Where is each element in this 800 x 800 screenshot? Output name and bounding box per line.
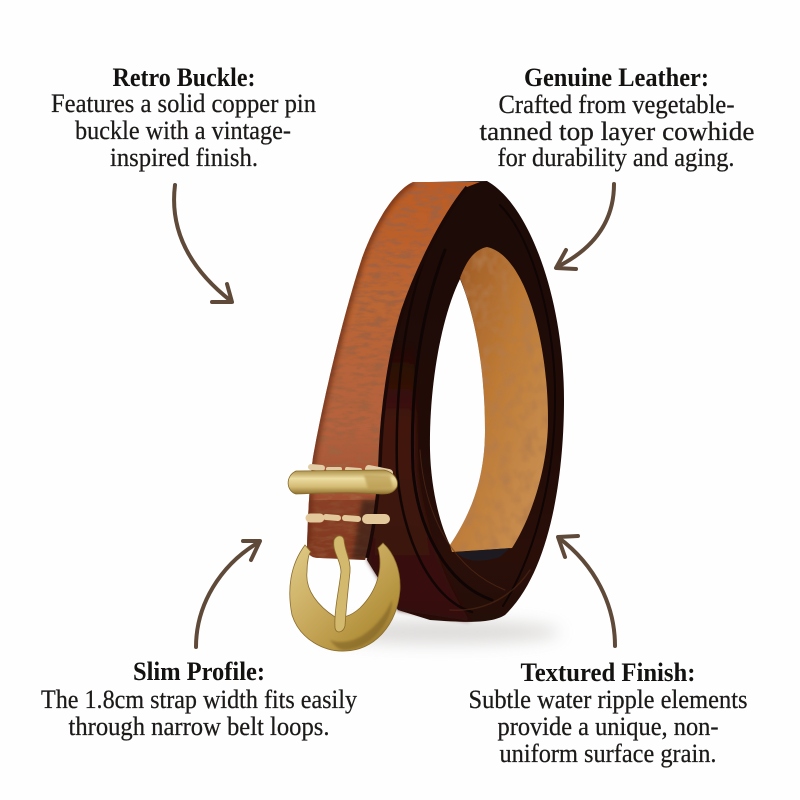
text: Textured Finish: provide a unique, non-: [498, 711, 718, 741]
keeper bar highlight: [364, 475, 393, 489]
upper stitches: [311, 467, 389, 473]
belt silhouette: dark edge: [367, 181, 564, 622]
keeper bar: [288, 470, 397, 494]
arrow: to genuine leather: [556, 184, 614, 269]
text: Slim Profile: The 1.8cm strap width fits easily: [41, 684, 358, 714]
text: Retro Buckle: Retro Buckle:: [112, 62, 256, 92]
text: Genuine Leather: [480, 62, 754, 172]
text: Retro Buckle: inspired finish.: [110, 142, 258, 172]
text: Textured Finish: uniform surface grain.: [500, 738, 716, 768]
face right dark line: [367, 187, 467, 558]
belt illustration: [288, 181, 564, 651]
text: Genuine Leather: tanned top layer cowhide: [480, 116, 754, 146]
text: Genuine Leather: for durability and aging.: [498, 142, 734, 172]
buckle ring: [290, 543, 400, 651]
text: Slim Profile: [41, 656, 358, 741]
text: Textured Finish: Subtle water ripple elements: [468, 684, 748, 714]
text: Genuine Leather: Genuine Leather:: [524, 62, 709, 92]
front leather face: [307, 182, 480, 560]
text: Genuine Leather: Crafted from vegetable-: [498, 89, 734, 119]
buckle ring shading: [330, 600, 392, 650]
belt hole: [430, 279, 485, 545]
lower red-brown edge: [368, 340, 470, 621]
buckle pin: [334, 536, 350, 632]
tan inner lining: [450, 247, 548, 552]
arrow: to slim profile: [196, 541, 260, 647]
edge ridges: [397, 205, 555, 612]
text: Slim Profile: Slim Profile:: [133, 656, 265, 686]
face edge shading: [306, 182, 413, 560]
text: Retro Buckle: Features a solid copper pin: [51, 88, 316, 118]
text: Textured Finish: Textured Finish:: [520, 657, 696, 687]
arrow: to retro buckle: [174, 185, 232, 302]
ground shadow: [320, 620, 560, 644]
text: Textured Finish: [468, 657, 748, 768]
arrow: to textured finish: [558, 536, 615, 646]
lower stitches: [310, 517, 385, 519]
text: Retro Buckle: [51, 62, 316, 172]
dark band under lining: [456, 548, 510, 561]
text: Slim Profile: through narrow belt loops.: [68, 711, 330, 741]
text: Retro Buckle: buckle with a vintage-: [75, 115, 291, 145]
